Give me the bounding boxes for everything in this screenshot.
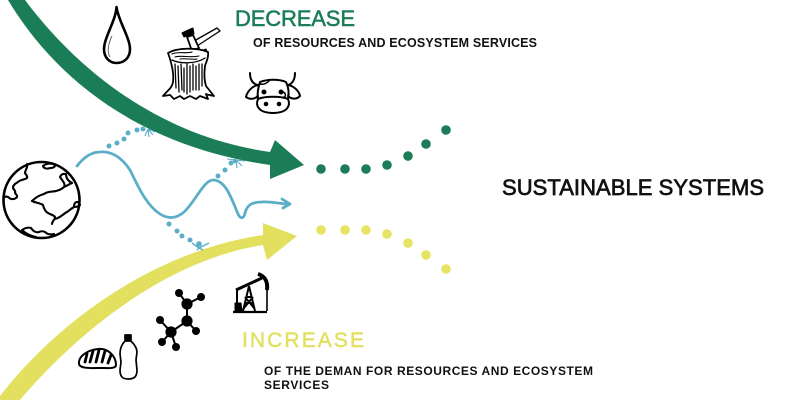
icon: tree stump with axe (163, 28, 220, 99)
text: of the demand: OF THE DEMAN FOR RESOURCES AND ECOSYSTEM (264, 364, 593, 378)
blue wavy line with arrow (77, 152, 290, 218)
icon: bottle (120, 335, 137, 379)
icon: bread (79, 349, 116, 368)
green dots (316, 125, 451, 174)
dotted link to yellow arrow (166, 222, 209, 250)
text: of the demand: SERVICES (264, 378, 329, 392)
heading: decrease: DECREASE (235, 6, 355, 31)
yellow dots (316, 225, 451, 274)
text: of resources: OF RESOURCES AND ECOSYSTEM SERVICES (253, 36, 537, 50)
green decrease arrow (8, 0, 304, 179)
icon: oil pump (233, 274, 267, 312)
heading: increase: INCREASE (242, 329, 364, 352)
dotted link to green arrow right (216, 159, 245, 178)
icon: molecule (156, 289, 205, 351)
dotted link to green arrow left (106, 126, 155, 148)
text: of the demand (264, 364, 593, 392)
icon: cow (246, 73, 300, 113)
yellow increase arrow (0, 223, 297, 400)
icon: water drop (104, 7, 130, 63)
heading: sustainable systems: SUSTAINABLE SYSTEMS (502, 175, 764, 200)
globe icon (4, 162, 80, 238)
blue dotted links (106, 126, 245, 250)
